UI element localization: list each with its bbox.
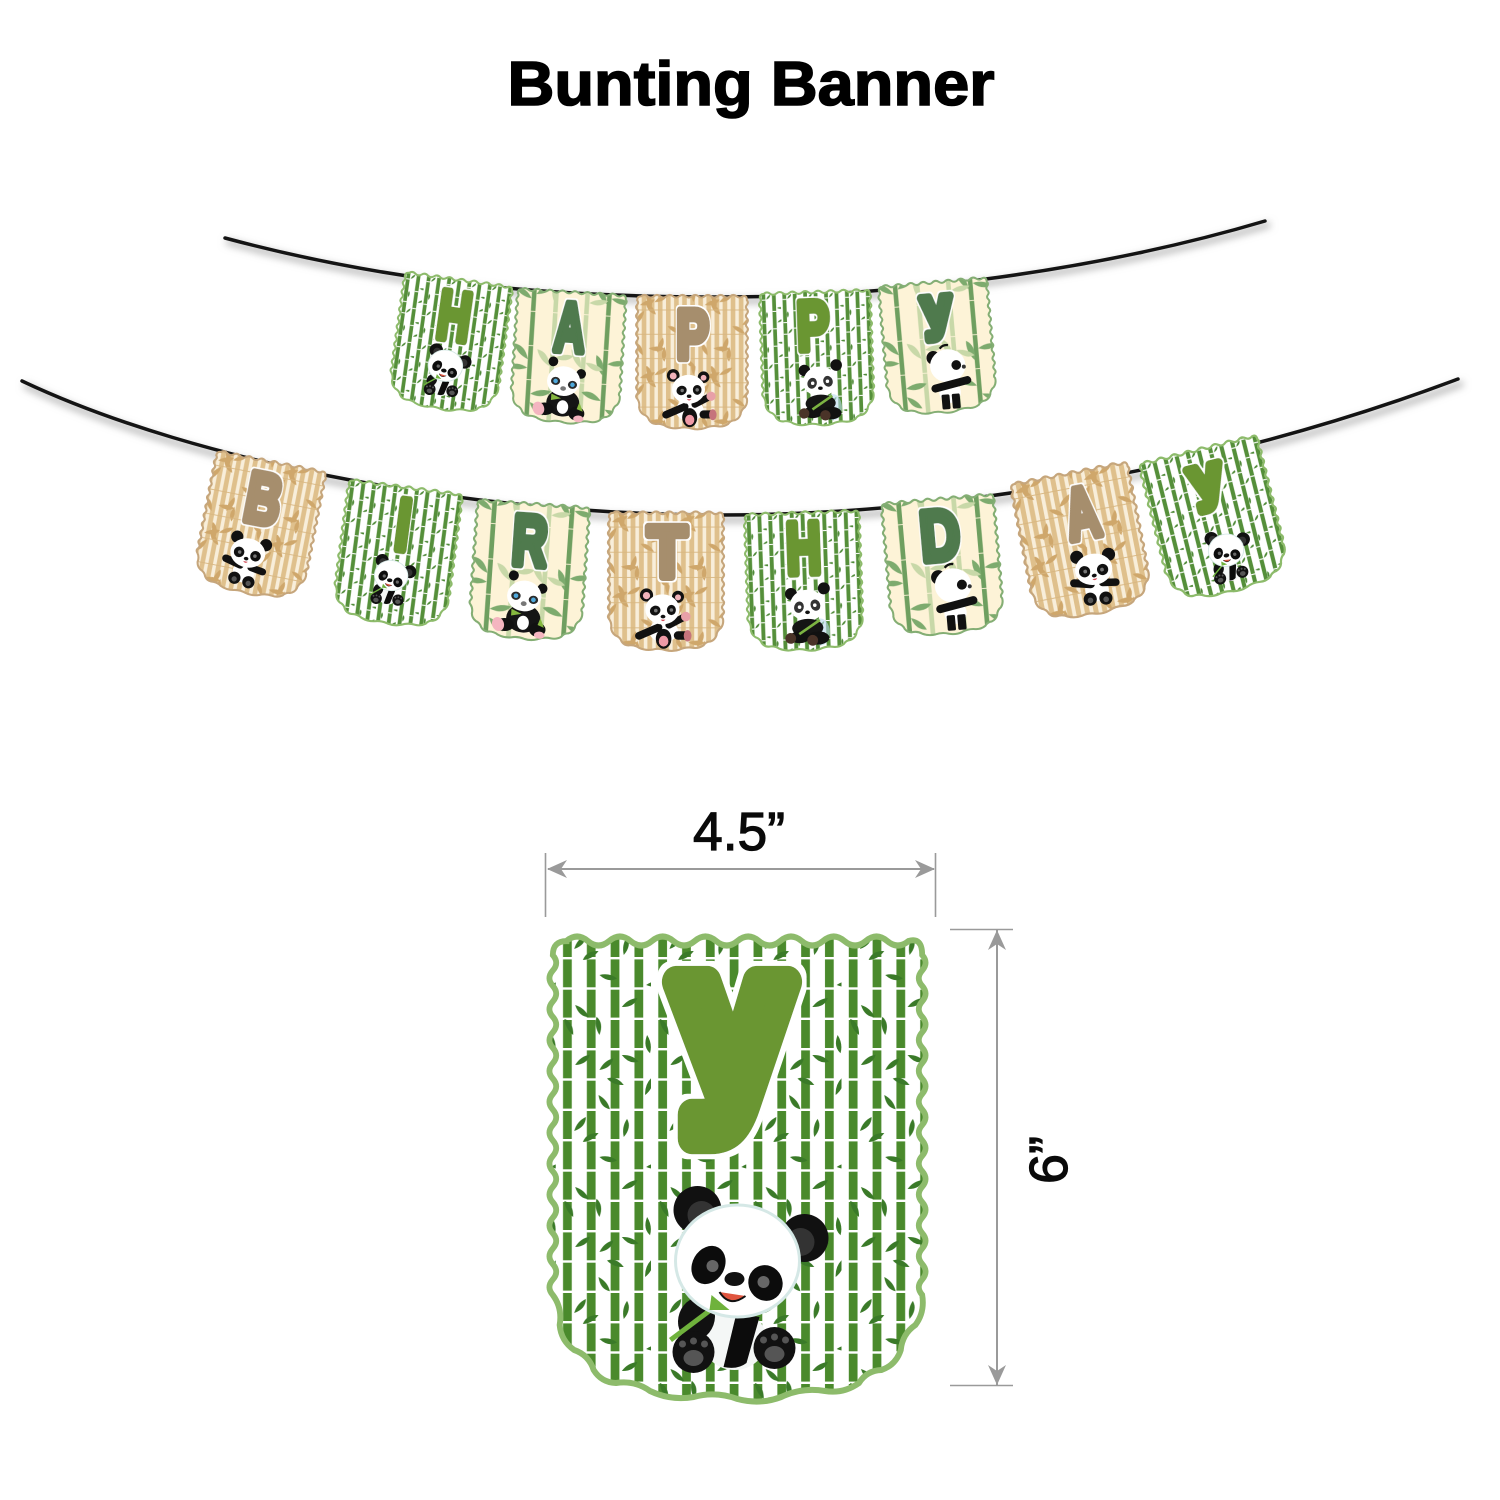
flag A tan xyxy=(1009,460,1155,626)
flag D: D xyxy=(917,495,963,577)
flag B xyxy=(190,450,327,605)
flag R xyxy=(467,497,591,644)
big flag Y xyxy=(549,904,926,1402)
flag Y beige: y xyxy=(918,276,955,342)
flag T: T xyxy=(648,513,687,593)
flag H xyxy=(386,271,514,417)
flag P tan: P xyxy=(676,296,709,373)
flag P tan xyxy=(636,295,748,429)
flag I xyxy=(330,478,464,632)
flag P green xyxy=(758,285,875,428)
large letter Y: y xyxy=(674,904,791,1143)
flag H green: H xyxy=(785,508,822,589)
title: Bunting Banner xyxy=(508,50,994,119)
flag A tan: A xyxy=(1058,471,1106,556)
height label: 6” xyxy=(1019,1136,1079,1184)
flag A: A xyxy=(552,289,587,367)
flag H green xyxy=(743,506,864,653)
flag R: R xyxy=(510,500,550,581)
width arrow xyxy=(546,853,936,917)
flag P green: P xyxy=(795,287,831,365)
flag Y green xyxy=(1137,432,1293,607)
flag shape xyxy=(549,936,926,1402)
flag Y green: y xyxy=(1181,442,1230,515)
panda xyxy=(670,1186,828,1373)
width label: 4.5” xyxy=(693,802,785,862)
height arrow xyxy=(950,930,1013,1386)
lower string xyxy=(22,379,1461,520)
flag B: B xyxy=(239,457,289,541)
flag I: I xyxy=(391,485,415,567)
flag D xyxy=(880,492,1006,639)
flag H: H xyxy=(433,277,476,357)
flag Y beige xyxy=(877,272,999,418)
flag A xyxy=(509,286,627,427)
upper string xyxy=(225,221,1268,301)
flag T xyxy=(608,511,724,651)
